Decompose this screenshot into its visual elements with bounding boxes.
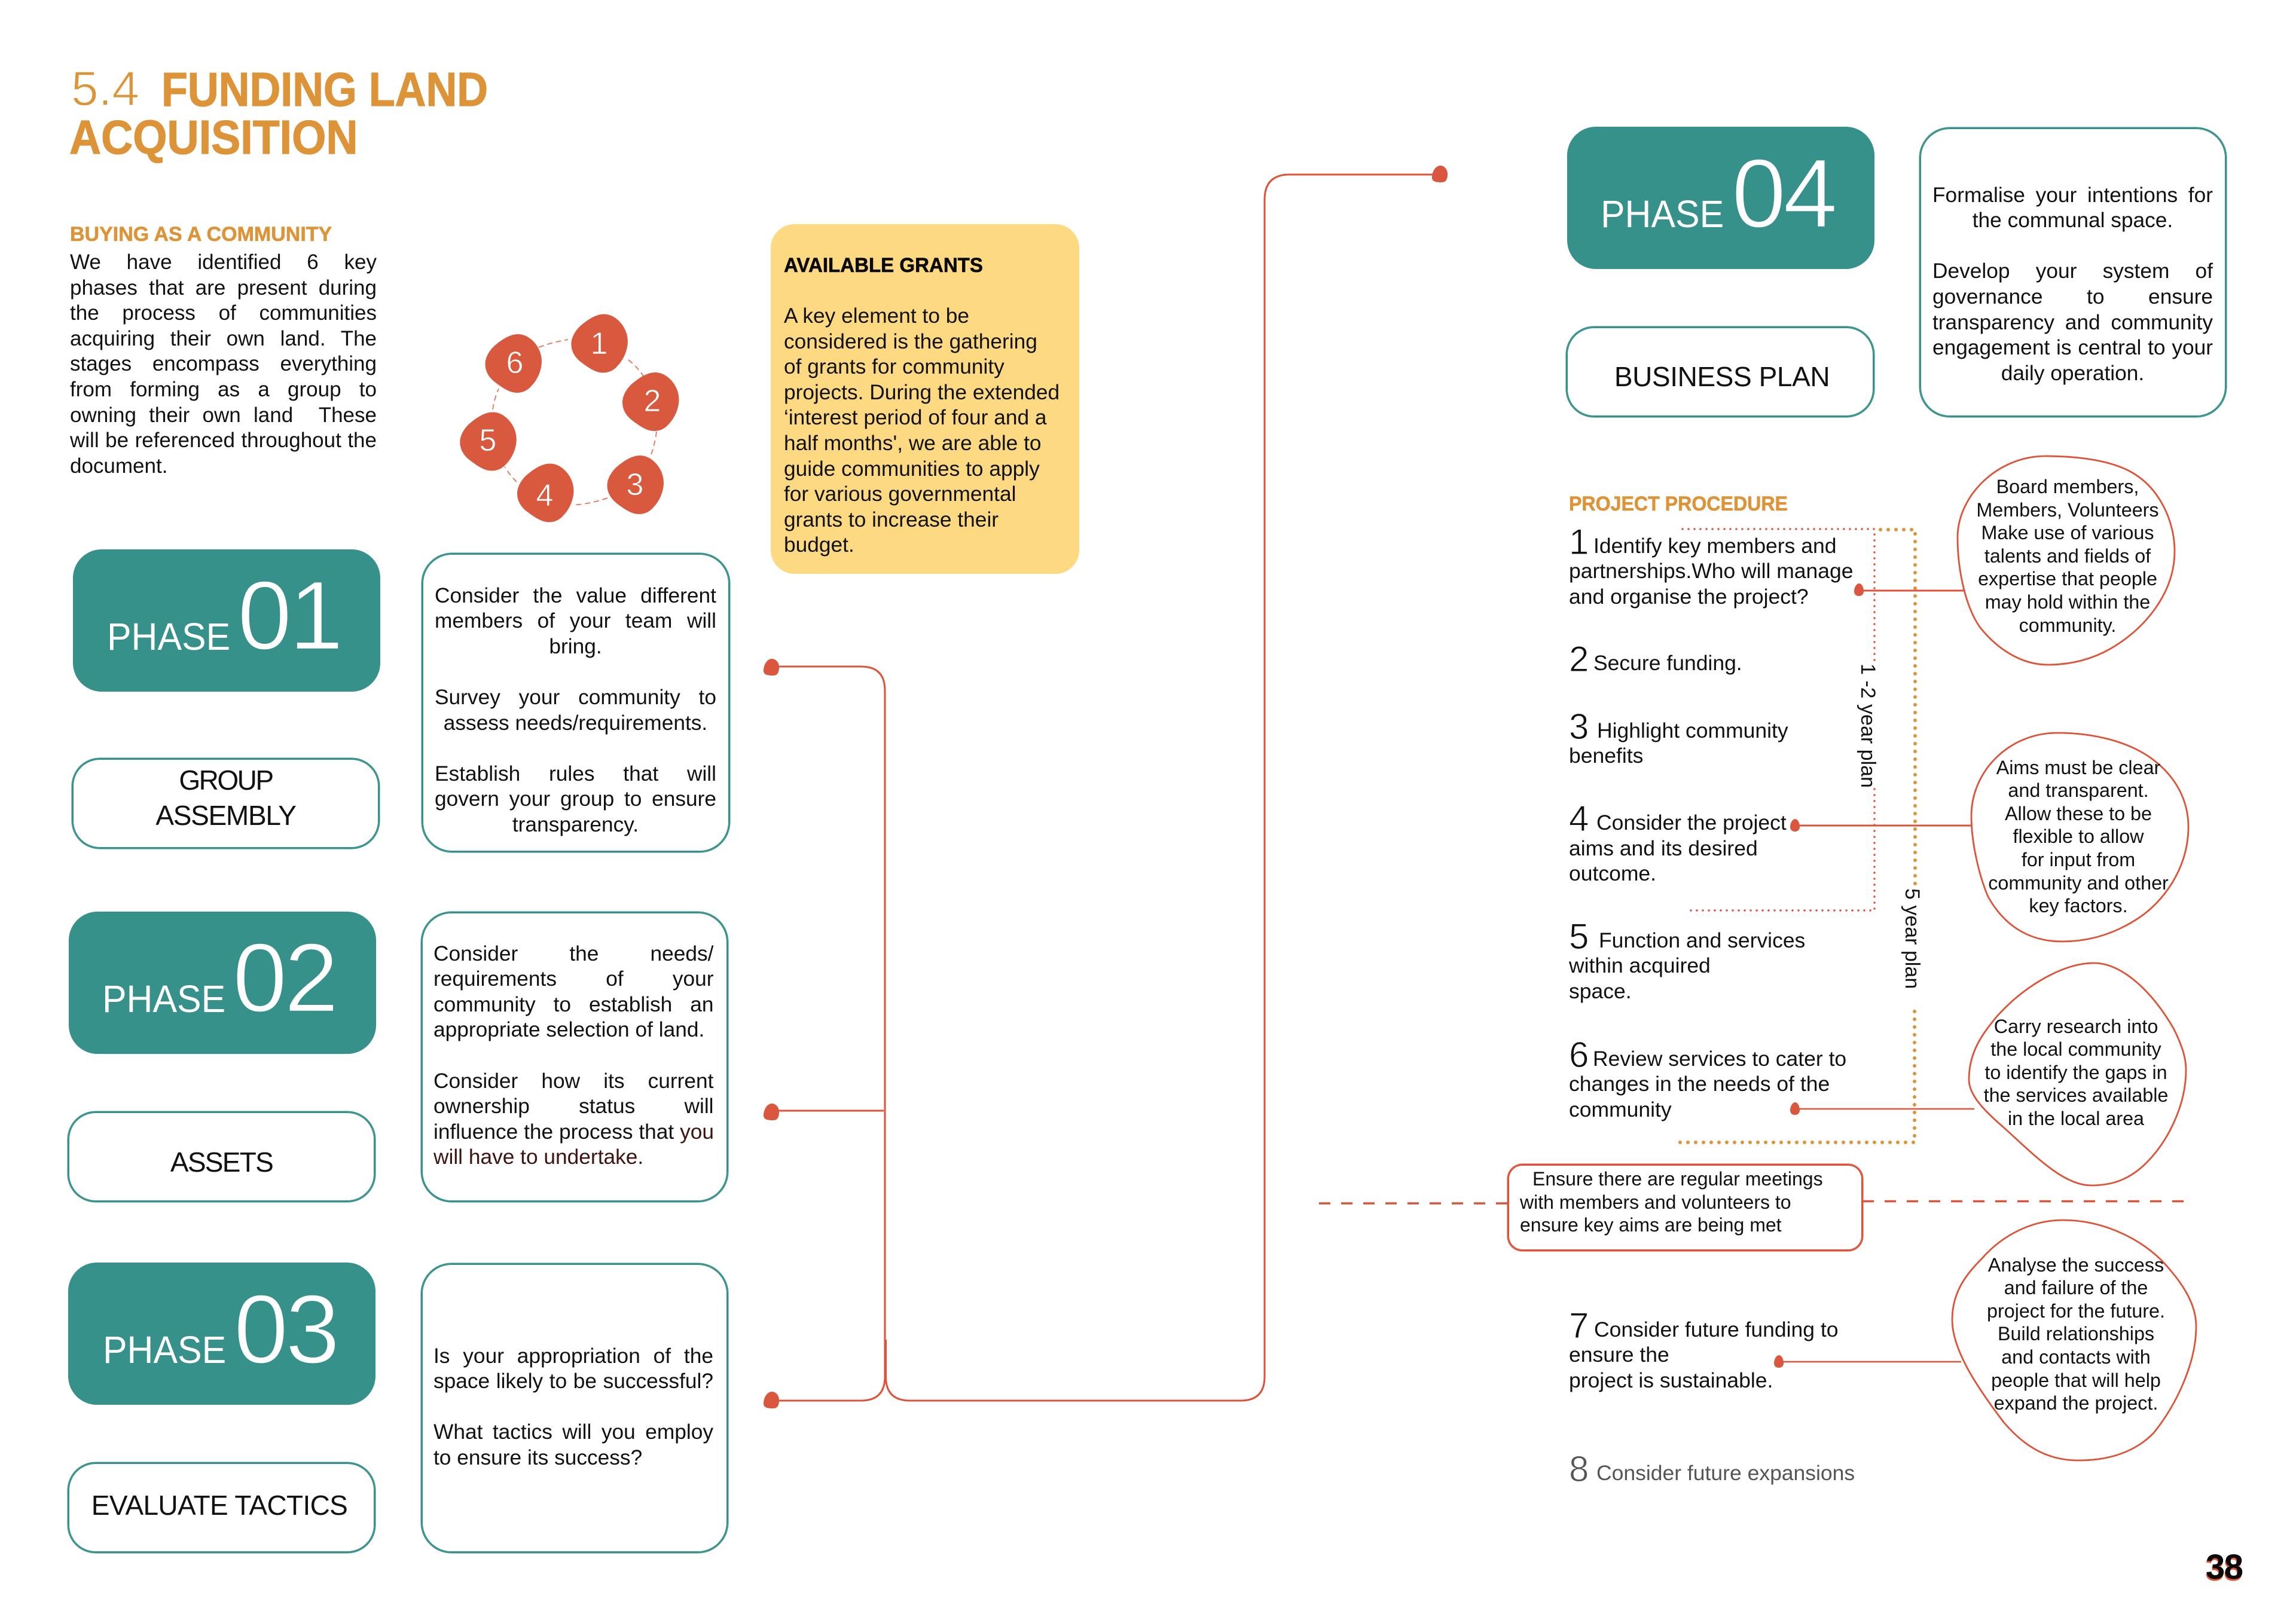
phase word: PHASE — [102, 977, 225, 1020]
description text — [1932, 184, 2213, 385]
grants text — [784, 304, 1060, 557]
description text: will have to undertake. — [433, 1145, 643, 1169]
text block: introduction: document. — [70, 454, 167, 478]
callout text: ensure key aims are being met — [1520, 1214, 1782, 1236]
step 4: outcome. — [1569, 861, 1656, 885]
step 3: Highlight community — [1597, 719, 1788, 742]
phase word: PHASE — [1601, 192, 1724, 236]
bubble text: aims: flexible to allow — [2013, 826, 2144, 847]
text block: introduction: from forming as a group to — [70, 378, 377, 401]
panel: assets — [68, 1112, 375, 1202]
grants text: considered is the gathering — [784, 330, 1037, 353]
description text: governance to ensure — [1932, 285, 2213, 308]
step 8: 8 — [1569, 1449, 1589, 1489]
grants text: guide communities to apply — [784, 457, 1040, 481]
bubble text: analyse: project for the future. — [1987, 1300, 2165, 1322]
bubble text: research: in the local area — [2008, 1108, 2144, 1129]
description text — [433, 1344, 713, 1469]
icon: bracket dot phase 03 — [764, 1392, 779, 1408]
title line two: ACQUISITION — [69, 111, 358, 164]
step 5: space. — [1569, 979, 1632, 1003]
step 5: within acquired — [1569, 953, 1711, 977]
description text: Survey your community to — [435, 686, 716, 709]
bubble text: aims: for input from — [2022, 849, 2135, 870]
icon: bracket dot phase 02 — [764, 1104, 779, 1120]
bubble text: aims: key factors. — [2029, 895, 2128, 916]
step 6: Review services to cater to — [1593, 1047, 1846, 1071]
text block: introduction: We have identified 6 key — [70, 250, 377, 274]
description text: Consider the value different — [435, 584, 716, 607]
grants text: for various governmental — [784, 482, 1016, 506]
step 7: project is sustainable. — [1569, 1368, 1773, 1392]
bubble text: research: Carry research into — [1994, 1016, 2158, 1037]
phase number: 03 — [234, 1274, 337, 1384]
bubble text: aims: Aims must be clear — [1996, 757, 2160, 778]
bubble text: analyse: and contacts with — [2001, 1346, 2151, 1368]
callout text: with members and volunteers to — [1520, 1191, 1791, 1213]
panel: phase 02 description — [421, 912, 727, 1202]
description text: Is your appropriation of the — [433, 1344, 713, 1368]
description text: members of your team will — [435, 609, 716, 632]
step 7: Consider future funding to — [1594, 1318, 1839, 1341]
step 4: aims and its desired — [1569, 836, 1758, 860]
description text — [435, 584, 716, 836]
label: BUSINESS PLAN — [1614, 361, 1830, 392]
label: EVALUATE TACTICS — [91, 1490, 347, 1521]
bubble text: aims: Allow these to be — [2005, 803, 2152, 824]
bubble text: aims: community and other — [1988, 872, 2169, 894]
step 2 — [1569, 639, 1742, 679]
description text: ownership status will — [433, 1095, 714, 1118]
description text: engagement is central to your — [1932, 336, 2213, 359]
callout: regular meetings — [1508, 1164, 1863, 1251]
bubble outline: people — [1958, 456, 2175, 665]
description text: assess needs/requirements. — [444, 711, 707, 735]
description text: space likely to be successful? — [433, 1370, 713, 1393]
bubble text: analyse: and failure of the — [2004, 1277, 2148, 1298]
description text: the communal space. — [1973, 209, 2173, 232]
panel: phase 02 — [68, 912, 375, 1054]
phase word: PHASE — [103, 1328, 227, 1371]
step 4: 4 — [1569, 799, 1589, 839]
bubble outline: aims — [1971, 733, 2188, 942]
step 4 — [1569, 799, 1787, 885]
description text: community to establish an — [433, 993, 714, 1016]
callout text: Ensure there are regular meetings — [1532, 1168, 1823, 1190]
phase number: 02 — [233, 923, 335, 1032]
bubble text: aims — [1988, 757, 2169, 916]
text block: introduction: acquiring their own land. The — [70, 327, 377, 350]
description text: requirements of your — [433, 967, 714, 991]
step 1: and organise the project? — [1569, 585, 1809, 609]
dashed divider around meetings callout — [1319, 1202, 2184, 1203]
bubble text: analyse: Build relationships — [1998, 1323, 2154, 1344]
step 8 — [1569, 1449, 1855, 1489]
grants text: half months', we are able to — [784, 432, 1042, 455]
step 6: changes in the needs of the — [1569, 1072, 1830, 1096]
diagram: six phase cycle: 6 — [506, 346, 523, 380]
bubble text: people: Make use of various — [1981, 522, 2154, 543]
timeline: 5 year plan dotted bracket: 5 year plan — [1901, 888, 1923, 989]
bubble text: analyse — [1987, 1254, 2165, 1414]
connector: step 7 to bubble — [1774, 1355, 1961, 1368]
grants text: of grants for community — [784, 355, 1004, 378]
timeline: 1-2 year plan dotted bracket — [1683, 529, 1879, 910]
description text — [433, 942, 714, 1169]
description text: Establish rules that will — [435, 762, 716, 785]
description text: Develop your system of — [1932, 259, 2213, 283]
text block: introduction: owning their own land These — [70, 404, 377, 427]
description text: govern your group to ensure — [435, 787, 716, 811]
grants text: budget. — [784, 533, 854, 557]
bubble text: research — [1984, 1016, 2168, 1129]
step 5: 5 — [1569, 916, 1589, 956]
title number: 5.4 — [71, 62, 139, 116]
icon: bracket dot phase 01 — [764, 659, 779, 676]
step 6 — [1569, 1035, 1846, 1121]
step 5 — [1569, 916, 1805, 1003]
step 2: Secure funding. — [1593, 651, 1742, 675]
timeline: 5 year plan dotted bracket — [1678, 530, 1923, 1142]
diagram: six phase cycle: 4 — [536, 478, 553, 513]
phase number: 04 — [1732, 139, 1834, 248]
title — [69, 62, 488, 164]
connector: step 4 to bubble — [1790, 819, 1972, 832]
step 1: Identify key members and — [1593, 534, 1836, 558]
panel: group assembly — [72, 759, 379, 848]
bubble text: people: Board members, — [1996, 476, 2139, 497]
bubble text: analyse: people that will help — [1991, 1370, 2161, 1391]
grants text: grants to increase their — [784, 508, 999, 531]
panel: phase 03 description — [422, 1264, 728, 1552]
bubble text: aims: and transparent. — [2008, 780, 2149, 801]
panel: evaluate tactics — [68, 1463, 375, 1552]
bubble text: people: Members, Volunteers — [1976, 499, 2159, 521]
heading: project procedure: PROJECT PROCEDURE — [1569, 493, 1787, 515]
icon: bracket dot phase 04 — [1432, 166, 1448, 182]
bubble text: research: the local community — [1990, 1038, 2161, 1060]
panel: phase 04 — [1567, 127, 1874, 269]
description text: transparency and community — [1932, 311, 2213, 334]
step 7: 7 — [1569, 1306, 1589, 1346]
step 7 — [1569, 1306, 1839, 1392]
heading: buying as a community: BUYING AS A COMMUNITY — [70, 223, 332, 246]
bubble outline: analyse — [1952, 1220, 2196, 1460]
step 2: 2 — [1569, 639, 1589, 679]
step 8: Consider future expansions — [1596, 1461, 1855, 1485]
description text: Formalise your intentions for — [1932, 184, 2213, 207]
text block: introduction — [70, 250, 377, 478]
step 6: 6 — [1569, 1035, 1589, 1075]
step 5: Function and services — [1599, 928, 1805, 952]
diagram: six phase cycle: 3 — [627, 467, 643, 502]
bubble text: people: community. — [2019, 615, 2116, 636]
phase word: PHASE — [106, 615, 230, 658]
panel: phase 01 — [73, 549, 380, 692]
grants text: projects. During the extended — [784, 381, 1060, 404]
bubble text: people: may hold within the — [1985, 591, 2150, 613]
step 7: ensure the — [1569, 1343, 1669, 1367]
connector: phases 01-03 bracket — [771, 175, 1440, 1401]
bubble text: analyse: Analyse the success — [1988, 1254, 2164, 1276]
text block: introduction: the process of communities — [70, 301, 377, 325]
bubble text: people — [1976, 476, 2159, 636]
panel: phase 01 description — [422, 554, 729, 852]
description text: daily operation. — [2001, 362, 2144, 385]
grants heading: AVAILABLE GRANTS — [784, 254, 983, 277]
description text: appropriate selection of land. — [433, 1018, 704, 1041]
bubble text: research: to identify the gaps in — [1984, 1062, 2167, 1083]
description text: What tactics will you employ — [433, 1420, 713, 1444]
phase number: 01 — [237, 561, 340, 670]
label line two: ASSEMBLY — [155, 800, 296, 831]
step 4: Consider the project — [1596, 811, 1787, 835]
step 3: 3 — [1569, 707, 1589, 747]
panel: phase 03 — [68, 1263, 375, 1405]
description text: to ensure its success? — [433, 1446, 642, 1469]
step 3 — [1569, 707, 1788, 768]
step 1: partnerships.Who will manage — [1569, 559, 1854, 583]
bubble text: people: expertise that people — [1978, 568, 2157, 589]
description text: Consider how its current — [433, 1069, 714, 1093]
page number: 38 — [2206, 1548, 2243, 1587]
connector: step 1 to bubble — [1854, 583, 1964, 596]
timeline: 1-2 year plan dotted bracket: 1 -2 year plan — [1857, 664, 1879, 788]
diagram: six phase cycle: 2 — [644, 384, 661, 418]
step 3: benefits — [1569, 744, 1643, 768]
panel: phase 04 description — [1920, 128, 2225, 417]
step 6: community — [1569, 1098, 1672, 1121]
text block: introduction: stages encompass everything — [70, 352, 377, 375]
diagram: six phase cycle — [460, 314, 679, 522]
bubble outline: research — [1969, 963, 2186, 1185]
panel: business plan — [1567, 327, 1874, 417]
label line one: GROUP — [179, 765, 273, 796]
description text: Consider the needs/ — [433, 942, 714, 965]
step 1: 1 — [1569, 522, 1589, 562]
callout text — [1520, 1168, 1823, 1236]
text block: introduction: phases that are present during — [70, 276, 377, 299]
title line one: FUNDING LAND — [161, 63, 488, 116]
bubble text: analyse: expand the project. — [1994, 1392, 2158, 1414]
text block: introduction: will be referenced throughout the — [70, 429, 377, 452]
description text: influence the process that you — [433, 1120, 714, 1144]
bubble text: research: the services available — [1984, 1084, 2168, 1106]
description text: bring. — [549, 635, 602, 658]
step 1 — [1569, 522, 1854, 609]
label: ASSETS — [170, 1147, 273, 1178]
connector: step 6 to bubble — [1790, 1102, 1974, 1115]
diagram: six phase cycle: 1 — [591, 326, 607, 361]
description text: transparency. — [512, 813, 639, 836]
grants text: A key element to be — [784, 304, 969, 328]
bubble text: people: talents and fields of — [1984, 545, 2151, 567]
diagram: six phase cycle: 5 — [480, 423, 496, 458]
grants text: ‘interest period of four and a — [784, 406, 1047, 429]
panel: available grants — [771, 224, 1079, 574]
